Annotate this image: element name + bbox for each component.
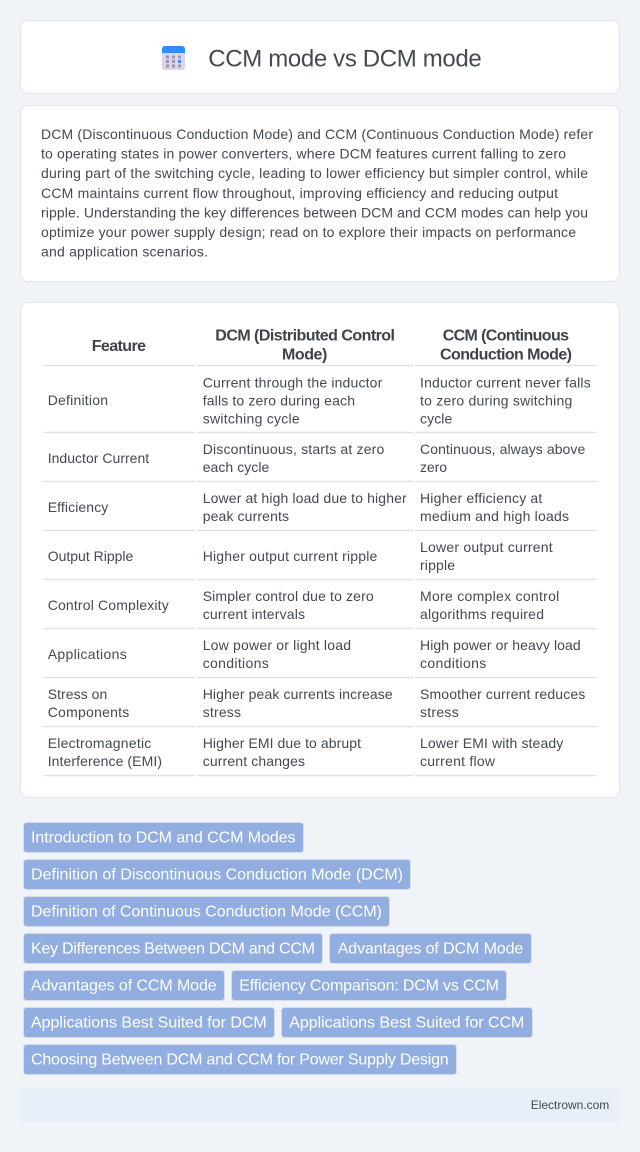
table header row: DCM (Distributed Control (215, 328, 395, 345)
row: definition: Current through the inductor (203, 374, 383, 390)
row: control complexity: current intervals (203, 606, 305, 622)
row: control complexity: algorithms required (420, 606, 544, 622)
row: efficiency: Lower at high load due to higher (203, 490, 407, 506)
panel: comparison table (20, 302, 620, 798)
row: definition: Definition (48, 392, 108, 408)
row: inductor current: Discontinuous, starts at zero (203, 441, 385, 457)
tag: advantages of DCM: Advantages of DCM Mode (338, 941, 523, 958)
tag: applications for DCM (24, 1008, 274, 1038)
panel: introduction text: and application scenarios. (41, 243, 208, 259)
tag: choosing between (24, 1044, 456, 1074)
panel: introduction text: ripple. Understanding the key differences between DCM and CCM modes can help you (41, 204, 588, 220)
table header row: CCM (Continuous (443, 328, 569, 345)
row: applications: conditions (203, 655, 269, 671)
panel: introduction text: DCM (Discontinuous Conduction Mode) and CCM (Continuous Conduction Mode) refer (41, 126, 593, 142)
row: inductor current: Continuous, always above (420, 441, 586, 457)
row: inductor current: Inductor Current (48, 450, 149, 466)
row: inductor current (48, 441, 586, 475)
row: electromagnetic interference (48, 735, 563, 769)
row: electromagnetic interference: Lower EMI with steady (420, 735, 563, 751)
row: electromagnetic interference: Interference (EMI) (48, 753, 162, 769)
row: efficiency: Higher efficiency at (420, 490, 542, 506)
tag: key differences (24, 934, 322, 964)
tag: applications for DCM: Applications Best Suited for DCM (31, 1015, 267, 1032)
title: CCM mode vs DCM mode (208, 46, 482, 73)
row: stress on components: Stress on (48, 686, 107, 702)
row: applications: Applications (48, 646, 127, 662)
row: control complexity: Control Complexity (48, 597, 169, 613)
table header row: Mode) (282, 346, 327, 363)
footer (20, 1088, 620, 1122)
row: definition (48, 374, 591, 426)
row: stress on components: Components (48, 704, 129, 720)
panel: introduction text: during part of the switching cycle, leading to lower efficiency but simpler control, while (41, 165, 588, 181)
table header row (92, 328, 572, 363)
tag: applications for CCM: Applications Best Suited for CCM (289, 1015, 524, 1032)
row: applications: Low power or light load (203, 637, 351, 653)
row: efficiency (48, 490, 569, 524)
row: efficiency: peak currents (203, 508, 289, 524)
tag: advantages of CCM: Advantages of CCM Mode (31, 978, 217, 995)
tag: definition of CCM (24, 896, 390, 926)
panel: header (20, 20, 620, 94)
panel: introduction text: optimize your power supply design; read on to explore their impacts on performance (41, 224, 576, 240)
tag: choosing between: Choosing Between DCM and CCM for Power Supply Design (31, 1052, 449, 1069)
row: definition: to zero during switching (420, 392, 572, 408)
row: efficiency: Efficiency (48, 499, 108, 515)
table header row: Feature (92, 338, 146, 355)
row: electromagnetic interference: current flow (420, 753, 496, 769)
row: definition: cycle (420, 410, 453, 426)
table header row: Conduction Mode) (440, 346, 572, 363)
tag: definition of DCM: Definition of Discontinuous Conduction Mode (DCM) (31, 867, 403, 884)
row: stress on components (48, 686, 585, 720)
row: stress on components: Higher peak currents increase (203, 686, 393, 702)
row: output ripple: ripple (420, 557, 455, 573)
footer: Electrown.com (531, 1098, 609, 1112)
tag: definition of CCM: Definition of Continuous Conduction Mode (CCM) (31, 904, 382, 921)
row: stress on components: stress (203, 704, 241, 720)
row: control complexity: More complex control (420, 588, 559, 604)
tag: efficiency comparison: Efficiency Comparison: DCM vs CCM (239, 978, 499, 995)
icon: calendar (162, 46, 185, 70)
tag: efficiency comparison (232, 970, 506, 1000)
row: definition: falls to zero during each (203, 392, 355, 408)
row: inductor current: zero (420, 459, 447, 475)
tag: introduction: Introduction to DCM and CCM Modes (31, 830, 296, 847)
row: stress on components: stress (420, 704, 459, 720)
row: electromagnetic interference: current changes (203, 753, 305, 769)
tag: introduction (24, 822, 304, 852)
row: output ripple: Higher output current ripple (203, 548, 378, 564)
row: definition: switching cycle (203, 410, 300, 426)
row: electromagnetic interference: Electromagnetic (48, 735, 151, 751)
tag: key differences: Key Differences Between DCM and CCM (31, 941, 315, 958)
row: definition: Inductor current never falls (420, 374, 591, 390)
tag: advantages of DCM (330, 934, 532, 964)
row: stress on components: Smoother current reduces (420, 686, 585, 702)
tag: applications for CCM (282, 1008, 532, 1038)
tag: definition of DCM (24, 860, 410, 890)
row: applications: High power or heavy load (420, 637, 581, 653)
row: output ripple: Lower output current (420, 539, 553, 555)
row: control complexity (48, 588, 559, 622)
panel: introduction text (20, 106, 620, 282)
row: applications: conditions (420, 655, 486, 671)
tag: advantages of CCM (24, 970, 224, 1000)
panel: introduction text: to operating states in power converters, where DCM features current falling to zero (41, 146, 566, 162)
row: efficiency: medium and high loads (420, 508, 569, 524)
row: output ripple (48, 539, 553, 573)
row: output ripple: Output Ripple (48, 548, 134, 564)
row: electromagnetic interference: Higher EMI due to abrupt (203, 735, 361, 751)
panel: introduction text: CCM maintains current flow throughout, improving efficiency and reducing output (41, 185, 558, 201)
row: inductor current: each cycle (203, 459, 270, 475)
topic tags (24, 822, 532, 1074)
row: applications (48, 637, 581, 671)
row: control complexity: Simpler control due to zero (203, 588, 374, 604)
